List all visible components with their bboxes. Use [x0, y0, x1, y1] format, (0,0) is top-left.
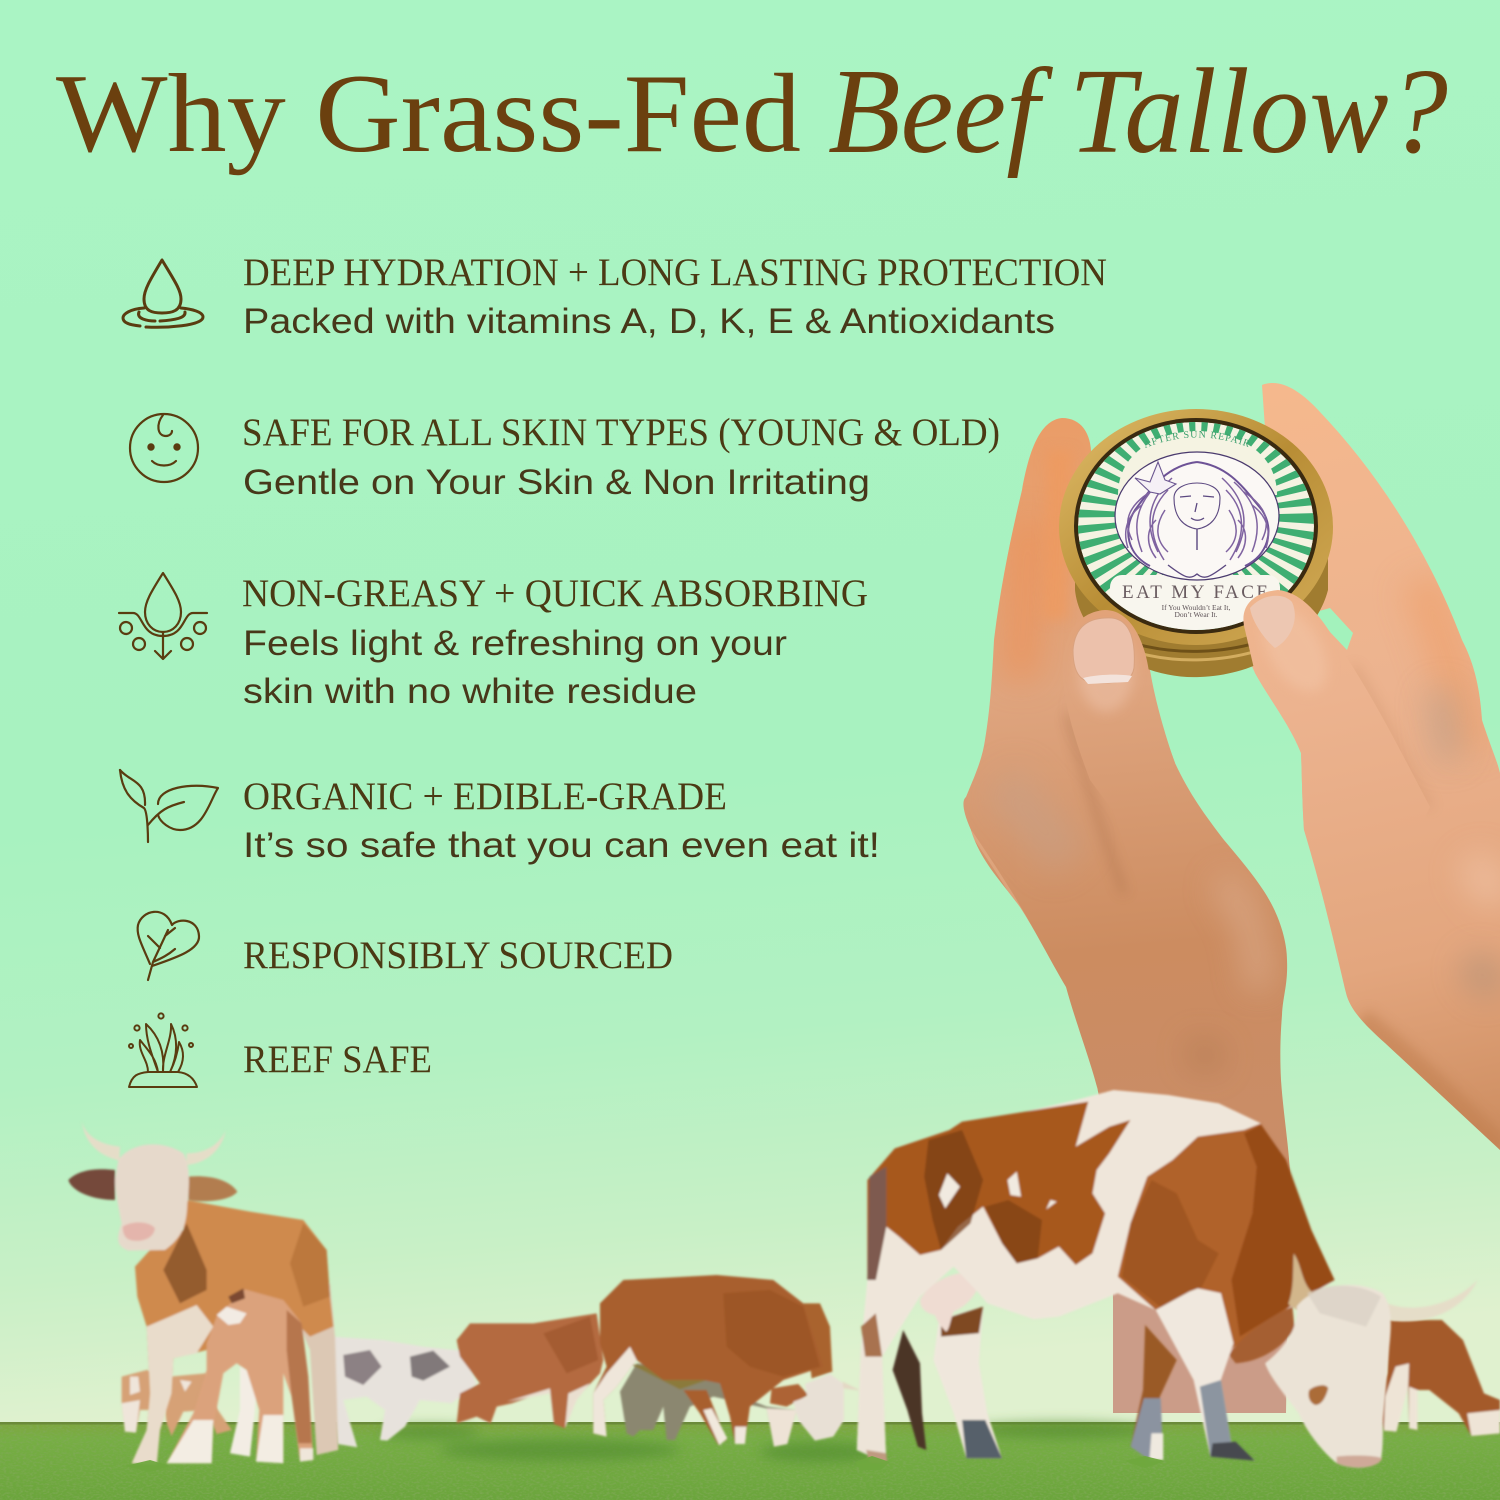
white leg markings	[593, 1347, 637, 1437]
big grazing cow	[857, 1090, 1478, 1468]
heading: DEEP HYDRATION + LONG LASTING PROTECTION	[243, 251, 1107, 294]
right ear	[188, 1176, 237, 1201]
heading: RESPONSIBLY SOURCED	[243, 934, 673, 977]
rear shading	[924, 1130, 983, 1250]
grass dark patches	[380, 1422, 1150, 1462]
body	[132, 1200, 333, 1465]
heading: ORGANIC + EDIBLE-GRADE	[243, 775, 727, 818]
icon: two leaves	[120, 770, 218, 842]
tail	[893, 1330, 926, 1450]
far front leg	[1130, 1325, 1177, 1460]
rear leg near	[857, 1347, 886, 1463]
tin side wall	[1075, 540, 1328, 677]
right hand shading	[1353, 580, 1500, 1150]
left thumb	[1063, 610, 1175, 860]
far front leg	[230, 1367, 257, 1457]
benefit: deep hydration	[123, 251, 1107, 341]
ear	[770, 1384, 808, 1407]
benefit: safe for all skin types	[130, 411, 1000, 502]
right thumb	[1243, 590, 1430, 880]
title	[56, 44, 1448, 179]
head	[115, 1144, 189, 1251]
background cows herd	[122, 1275, 1500, 1447]
horn	[843, 1382, 861, 1391]
left hand shading	[971, 450, 1258, 1090]
muzzle	[1337, 1456, 1382, 1468]
title: Beef Tallow?	[828, 44, 1448, 179]
icon: water drop with ripples	[123, 260, 203, 327]
right horn	[1387, 1280, 1478, 1321]
benefit: organic	[120, 770, 880, 865]
tagline: If You Wouldn’t Eat It,	[1162, 603, 1230, 612]
gap between thumb and fingers	[1312, 608, 1353, 650]
far-side rump	[803, 1303, 832, 1378]
left hand	[963, 418, 1290, 1413]
description: Feels light & refreshing on your	[243, 624, 787, 663]
shading	[723, 1290, 820, 1377]
gold rim	[1059, 409, 1333, 645]
calf silhouette	[167, 1289, 313, 1463]
front leg	[683, 1390, 727, 1445]
calf white socks	[256, 1415, 283, 1463]
brown grazing cow middle	[593, 1275, 861, 1447]
udder	[920, 1273, 981, 1332]
description: It’s so safe that you can even eat it!	[243, 826, 880, 865]
head	[793, 1374, 844, 1441]
heading: REEF SAFE	[243, 1038, 432, 1081]
benefit: reef safe	[129, 1013, 432, 1087]
body silhouette	[857, 1090, 1335, 1463]
top band	[1118, 431, 1277, 495]
description: Gentle on Your Skin & Non Irritating	[243, 463, 870, 502]
spotted white calf	[332, 1337, 477, 1447]
head patch	[1309, 1385, 1328, 1405]
icon: coral and seaweed	[129, 1013, 197, 1087]
description: Packed with vitamins A, D, K, E & Antioxidants	[243, 302, 1055, 341]
standing cow left	[68, 1122, 338, 1465]
small calf behind left cow	[122, 1370, 232, 1436]
tagline	[1162, 603, 1230, 619]
grass ground	[0, 1422, 1500, 1500]
hands holding tin	[963, 383, 1500, 1413]
calf	[167, 1288, 313, 1463]
white specks	[939, 1172, 1057, 1209]
head	[1265, 1285, 1391, 1468]
label	[1078, 422, 1314, 635]
neck shading	[1231, 1125, 1335, 1337]
benefit: non-greasy: skin with no white residue	[243, 672, 697, 711]
horns	[82, 1122, 120, 1161]
sunburst rays	[1122, 441, 1272, 591]
shading	[163, 1223, 207, 1303]
benefit: non-greasy	[119, 572, 868, 711]
title: Why Grass-Fed	[56, 52, 801, 176]
olive belly shadow	[630, 1364, 722, 1389]
icon: baby face	[130, 414, 198, 482]
label curved text: AFTER SUN REPAIR	[1145, 430, 1249, 448]
far-side legs and belly	[620, 1363, 797, 1447]
ear	[1229, 1307, 1295, 1363]
front leg and chest white	[132, 1305, 213, 1465]
brown shoulder and neck	[1118, 1123, 1335, 1350]
grass tufts in front of hooves	[125, 1456, 1165, 1472]
near body	[593, 1275, 823, 1444]
brown cow rear	[457, 1313, 603, 1428]
near front leg	[1156, 1288, 1255, 1460]
rear leg two	[933, 1307, 1002, 1458]
benefit: responsibly sourced	[138, 912, 673, 980]
woman illustration	[1115, 452, 1279, 580]
chest legs	[767, 1408, 797, 1447]
tin	[1059, 409, 1333, 678]
heading: NON-GREASY + QUICK ABSORBING	[242, 572, 868, 615]
far right grazing cow	[1375, 1320, 1500, 1436]
brand name: EAT MY FACE	[1122, 582, 1268, 603]
brand text pill	[1110, 575, 1280, 635]
left horn	[1288, 1253, 1318, 1310]
calf head patch	[217, 1307, 247, 1325]
rear brown	[867, 1102, 1130, 1280]
left ear	[68, 1169, 115, 1200]
right hand	[1240, 383, 1500, 1150]
tagline: Don’t Wear It.	[1174, 610, 1218, 619]
muzzle	[123, 1222, 155, 1241]
icon: heart-shaped leaf	[138, 912, 199, 980]
heading: SAFE FOR ALL SKIN TYPES (YOUNG & OLD)	[242, 411, 1000, 454]
rear leg	[300, 1283, 338, 1455]
icon: drop absorbing into skin	[119, 573, 207, 659]
